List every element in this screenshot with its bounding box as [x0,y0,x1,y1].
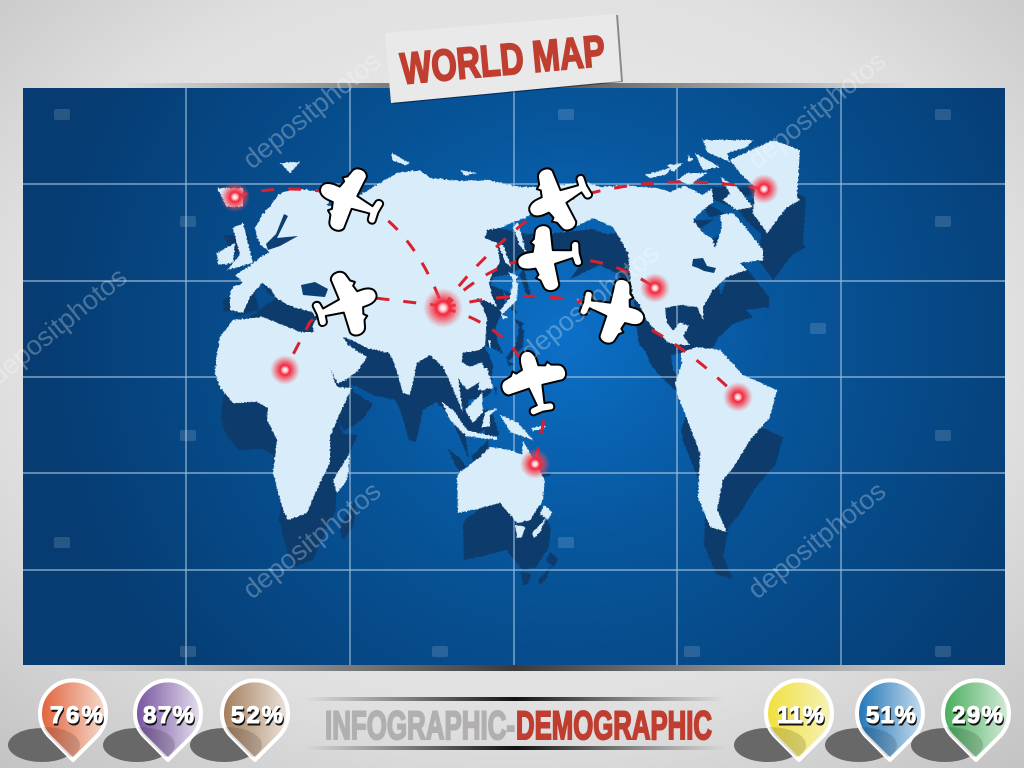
grid lines [23,88,1005,665]
pin: 87%: 87% [143,702,194,729]
title: WORLD MAP [398,27,607,94]
watermark cameras [54,109,951,657]
watermarks: depositphotos [742,476,891,605]
inland seas [266,214,716,351]
pin: 11% [734,680,832,763]
map top and bottom shadows [60,83,970,671]
city markers [220,174,779,479]
flight routes [235,182,764,464]
pin: 76% [8,680,106,763]
pin: 51% [825,680,923,763]
pin: 87% [103,680,201,763]
panel: map [23,88,1005,665]
title label [385,14,623,104]
banner text: DEMOGRAPHIC [516,704,712,748]
pin: 52% [190,680,288,763]
watermarks: depositphotos [742,46,891,175]
continents [215,140,800,538]
pin: 76%: 76% [50,702,103,729]
pin: 51%: 51% [866,702,916,729]
watermarks: depositphotos [237,46,386,175]
airplanes [312,167,646,416]
pin: 29% [911,680,1009,763]
continent shadows [221,187,806,585]
watermarks: depositphotos [237,476,386,605]
pin: 29%: 29% [952,702,1003,729]
banner text: INFOGRAPHIC- [325,704,515,748]
watermarks: depositphotos [515,238,664,367]
bottom banner [305,697,725,750]
pin: 11%: 11% [777,702,824,729]
watermarks [0,46,891,605]
pin: 52%: 52% [231,702,283,729]
